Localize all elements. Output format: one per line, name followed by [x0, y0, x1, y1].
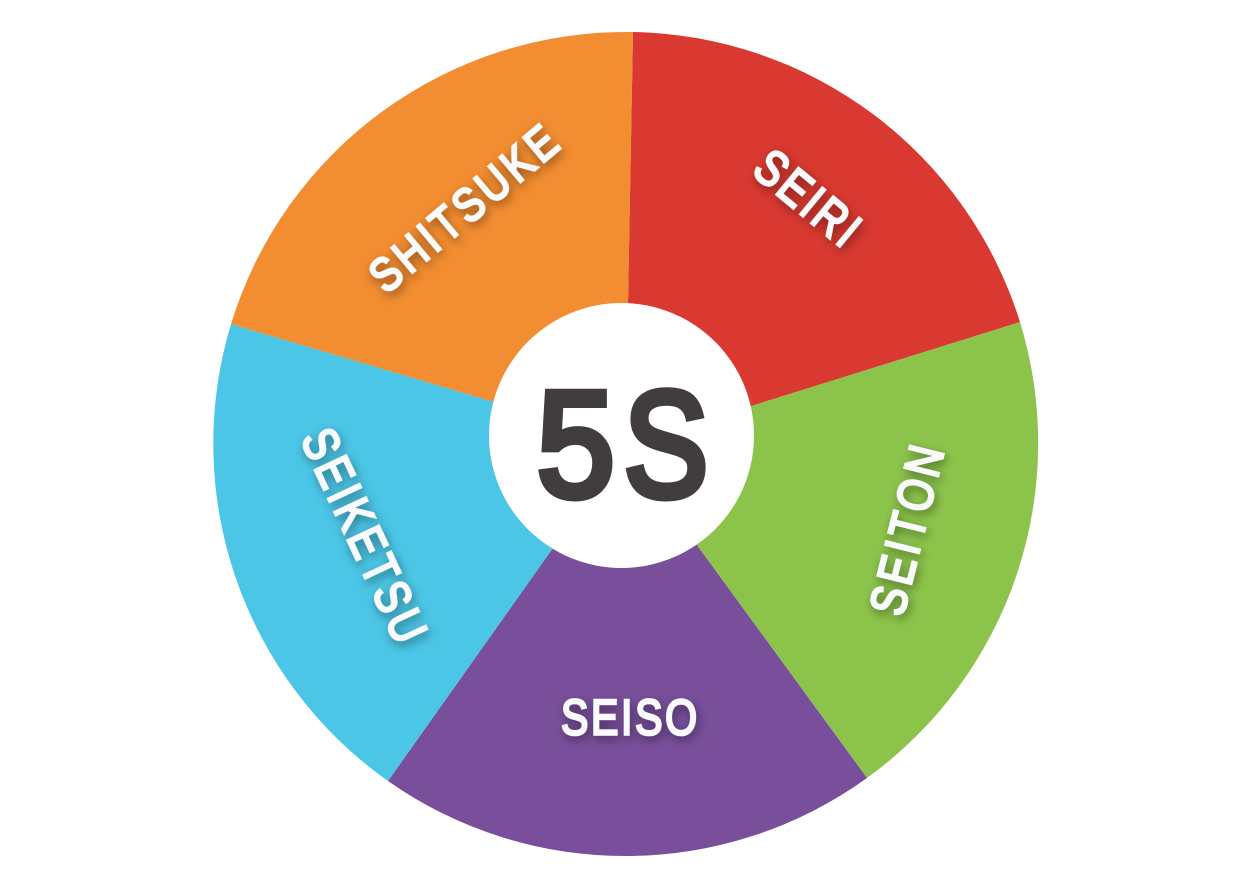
- segment: SEITON: [625, 322, 1038, 778]
- label: SEISO: SEISO: [561, 690, 697, 745]
- label: SEITON: SEITON: [859, 440, 955, 621]
- label: SEIKETSU: SEIKETSU: [290, 420, 438, 651]
- segment: SEIKETSU: [213, 324, 625, 781]
- label: SHITSUKE: SHITSUKE: [360, 116, 569, 303]
- segment: SEISO: [388, 435, 867, 856]
- segment: SHITSUKE: [231, 32, 633, 435]
- center circle: [489, 303, 754, 568]
- title: 5S: S: [624, 362, 708, 528]
- title: 5S: 5: [537, 360, 615, 528]
- label: SEIRI: SEIRI: [743, 138, 871, 257]
- title: 5S: [537, 360, 708, 528]
- segment: SEIRI: [625, 32, 1020, 435]
